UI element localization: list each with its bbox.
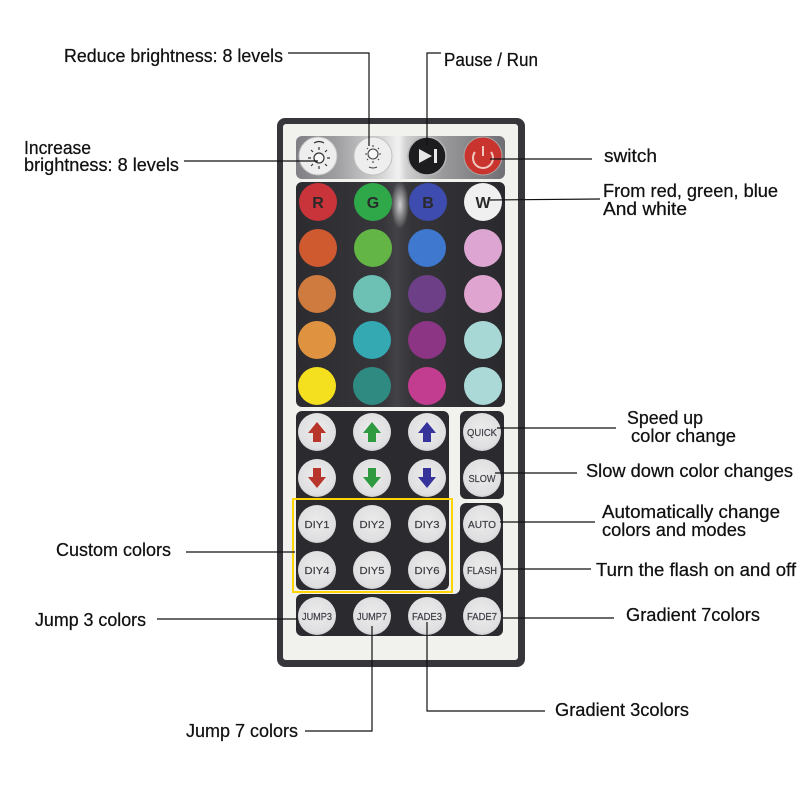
callout: jump 3 colours: Jump 3 colors: [35, 609, 146, 630]
text buttons: FLASH: [467, 565, 497, 577]
arrow buttons: [298, 413, 446, 497]
text buttons: FADE7: [467, 611, 497, 623]
callout: gradient 3 colours: Gradient 3colors: [555, 699, 689, 720]
text buttons: QUICK: [467, 427, 497, 439]
callout: automatic change: Automatically change: [602, 501, 780, 522]
callout: increase brightness: Increase: [24, 137, 91, 158]
callout: automatic change: colors and modes: [602, 519, 746, 540]
callout: custom colours: Custom colors: [56, 539, 171, 560]
callout: switch: switch: [604, 145, 657, 166]
callout: red green blue white: And white: [603, 198, 687, 219]
text buttons: FADE3: [412, 611, 442, 623]
text buttons: SLOW: [468, 473, 496, 485]
callout: jump 7 colours: Jump 7 colors: [186, 720, 298, 741]
callout: jump 7 colours: [186, 626, 372, 741]
panel: mode and jump keys: [296, 503, 503, 636]
callout: speed up: [497, 407, 736, 446]
colour buttons: [298, 183, 502, 405]
button W: [464, 183, 502, 221]
callout: flash: Turn the flash on and off: [596, 559, 797, 580]
text buttons: DIY2: [360, 519, 385, 531]
button: pause run: [408, 137, 446, 175]
callout: slow down: Slow down color changes: [586, 460, 793, 481]
button B: B: [422, 195, 434, 212]
callout: pause run: [427, 49, 538, 145]
text buttons: AUTO: [468, 519, 496, 531]
glare on colour panel: [391, 181, 409, 229]
panel: colour keys: [296, 182, 505, 407]
callout: speed up: color change: [631, 425, 736, 446]
button R: [299, 183, 337, 221]
callout: reduce brightness: [64, 45, 369, 146]
colour swatch rows: [298, 229, 502, 405]
button R: R: [312, 195, 324, 212]
text buttons: DIY6: [414, 565, 440, 577]
button: power switch: [464, 137, 502, 175]
callout: gradient 3 colours: [427, 622, 689, 720]
callout: increase brightness: brightness: 8 levels: [24, 154, 179, 175]
callout: increase brightness: [24, 137, 318, 175]
callout: speed up: Speed up: [627, 407, 703, 428]
callout: gradient 7 colours: Gradient 7colors: [626, 604, 760, 625]
text buttons: JUMP7: [357, 611, 387, 623]
text buttons: [298, 413, 501, 635]
remote control: [277, 118, 525, 667]
button G: [354, 183, 392, 221]
highlight: DIY custom colours: [293, 499, 452, 592]
text buttons: DIY5: [360, 565, 385, 577]
callout: red green blue white: From red, green, blue: [603, 180, 778, 201]
button W: W: [475, 195, 491, 212]
panel: arrows and DIY keys: [296, 411, 449, 590]
button B: [409, 183, 447, 221]
remote body: [277, 118, 525, 667]
callout: red green blue white: [490, 180, 778, 219]
text buttons: DIY4: [304, 565, 330, 577]
remote face plate: [283, 124, 518, 660]
panel: speed keys: [460, 411, 504, 499]
panel: top function keys: [296, 136, 505, 179]
text buttons: DIY3: [414, 519, 440, 531]
callout: reduce brightness: Reduce brightness: 8 levels: [64, 45, 283, 66]
button: increase brightness: [299, 137, 337, 175]
button G: G: [367, 195, 379, 212]
callout: pause run: Pause / Run: [444, 49, 538, 70]
text buttons: DIY1: [304, 519, 330, 531]
text buttons: JUMP3: [302, 611, 332, 623]
button: reduce brightness: [354, 137, 392, 175]
callout: automatic change: [500, 501, 780, 540]
